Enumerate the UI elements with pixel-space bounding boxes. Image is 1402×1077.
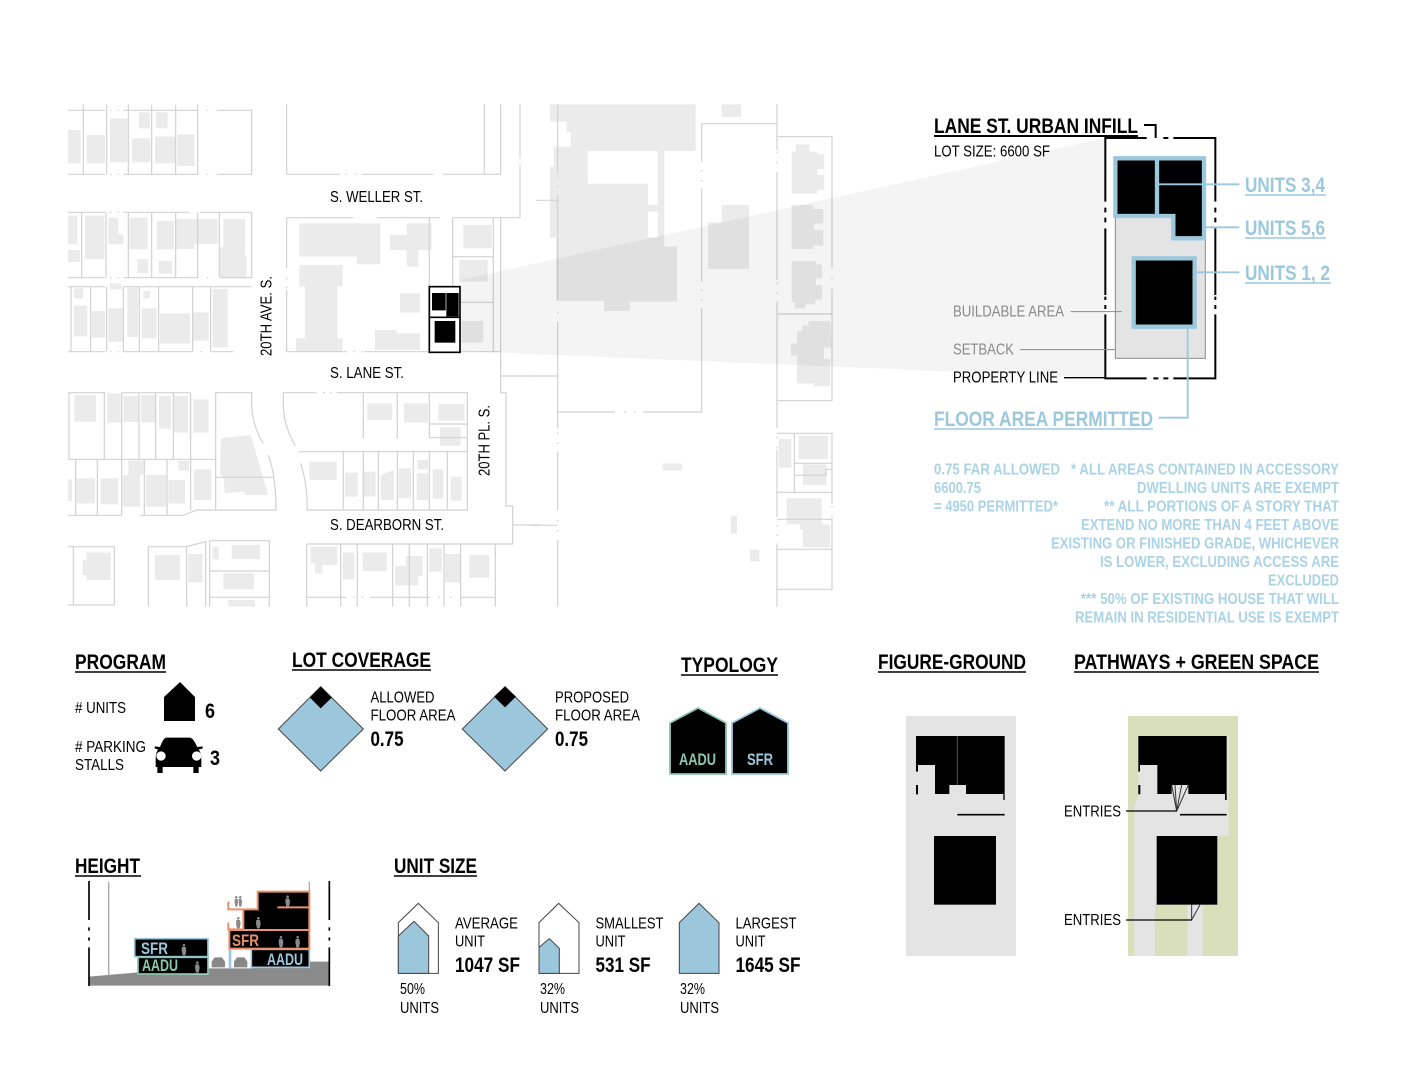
- street labels: S. DEARBORN ST.: [330, 517, 444, 534]
- exemption notes: IS LOWER, EXCLUDING ACCESS ARE: [1100, 554, 1339, 571]
- panel: unit size: [394, 854, 801, 1017]
- average unit share: UNITS: [400, 1000, 439, 1017]
- entries callout lower: ENTRIES: [1064, 912, 1121, 929]
- pathways plan: [1128, 716, 1238, 956]
- heading: program: PROGRAM: [75, 650, 166, 674]
- unit labels: UNITS 1, 2: [1245, 261, 1330, 285]
- site plan legend: BUILDABLE AREA: [953, 304, 1064, 320]
- entries callout upper: [1064, 804, 1177, 820]
- allowed floor area text: [370, 690, 456, 751]
- FAR calculation: = 4950 PERMITTED*: [934, 498, 1059, 516]
- icon: AADU house: AADU: [679, 750, 716, 769]
- average unit share: 50%: [400, 981, 425, 998]
- average unit text: 1047 SF: [455, 954, 520, 977]
- lot size: LOT SIZE: 6600 SF: [934, 144, 1050, 160]
- building labels: AADU: [142, 956, 178, 975]
- largest unit share: [680, 981, 719, 1017]
- units 1-2 footprint: [1134, 258, 1195, 327]
- unit labels: UNITS 5,6: [1245, 216, 1325, 240]
- smallest unit text: UNIT: [596, 934, 626, 950]
- allowed floor area text: 0.75: [370, 728, 404, 751]
- figure-ground plan: [906, 716, 1016, 956]
- building labels: AADU: [267, 950, 303, 969]
- building labels: [141, 931, 303, 975]
- exemption notes: ** ALL PORTIONS OF A STORY THAT: [1104, 498, 1339, 516]
- street labels: S. LANE ST.: [330, 365, 404, 382]
- site plan legend: PROPERTY LINE: [953, 370, 1058, 386]
- panel: program: [75, 650, 220, 774]
- units 3-6 footprint: [1115, 158, 1204, 238]
- floor area permitted heading: FLOOR AREA PERMITTED: [934, 407, 1153, 431]
- FAR calculation: 0.75 FAR ALLOWED: [934, 462, 1060, 478]
- street labels: 20TH AVE. S.: [258, 276, 276, 356]
- icon: car: [155, 738, 203, 773]
- street labels: 20TH PL. S.: [476, 405, 494, 476]
- heading: unit size: UNIT SIZE: [394, 854, 477, 878]
- smallest unit text: 531 SF: [596, 954, 651, 977]
- icon: house: [164, 682, 195, 721]
- street labels: S. WELLER ST.: [330, 189, 423, 206]
- map: north-west blocks: [68, 104, 252, 352]
- section drawing: [89, 881, 329, 986]
- entries callout upper: ENTRIES: [1064, 804, 1121, 820]
- map: project site footprint: [429, 287, 460, 352]
- largest unit text: LARGEST: [736, 916, 797, 932]
- proposed floor area text: PROPOSED: [555, 690, 629, 706]
- largest unit text: 1645 SF: [736, 954, 801, 977]
- FAR calculation: [934, 462, 1060, 516]
- panel: figure-ground: [878, 650, 1026, 956]
- proposed floor area text: FLOOR AREA: [555, 708, 640, 724]
- site plan diagram: [1020, 125, 1239, 418]
- proposed floor area text: 0.75: [555, 728, 588, 751]
- heading: lot coverage: LOT COVERAGE: [292, 648, 431, 672]
- vicinity map: [68, 104, 832, 607]
- parked cars: [212, 957, 247, 967]
- smallest unit share: 32%: [540, 981, 565, 998]
- heading: figure-ground: FIGURE-GROUND: [878, 650, 1026, 674]
- panel: lot coverage: [278, 648, 640, 771]
- allowed floor area text: ALLOWED: [370, 690, 434, 706]
- allowed floor area diamond: [278, 687, 363, 771]
- heading: pathways + green space: PATHWAYS + GREEN SPACE: [1074, 650, 1319, 674]
- exemption notes: EXCLUDED: [1268, 572, 1339, 590]
- map: south blocks: [68, 360, 540, 607]
- icon: SFR house: SFR: [747, 750, 773, 769]
- site plan legend: [953, 304, 1064, 386]
- proposed floor area diamond: [462, 687, 548, 771]
- largest unit text: [736, 916, 801, 977]
- property line: [1105, 125, 1215, 378]
- smallest unit share: [540, 981, 579, 1017]
- site plan legend: SETBACK: [953, 342, 1014, 358]
- divider between units: [1150, 158, 1163, 216]
- icon: average unit house: [398, 903, 438, 973]
- parking row label: STALLS: [75, 757, 124, 774]
- heading: height: HEIGHT: [75, 854, 140, 878]
- average unit text: UNIT: [455, 934, 485, 950]
- smallest unit text: [596, 916, 664, 977]
- building labels: SFR: [141, 939, 168, 958]
- largest unit share: UNITS: [680, 1000, 719, 1017]
- unit labels: [1245, 173, 1331, 285]
- units count: 6: [205, 700, 215, 723]
- exemption notes: *** 50% OF EXISTING HOUSE THAT WILL: [1081, 591, 1339, 608]
- allowed floor area text: FLOOR AREA: [370, 708, 456, 724]
- panel: typology: [670, 653, 788, 774]
- average unit share: [400, 981, 439, 1017]
- map: east blocks: [530, 104, 832, 607]
- property lines: [89, 881, 329, 986]
- entries callout lower: [1064, 912, 1192, 929]
- exemption notes: REMAIN IN RESIDENTIAL USE IS EXEMPT: [1075, 610, 1339, 626]
- exemption notes: * ALL AREAS CONTAINED IN ACCESSORY: [1071, 462, 1339, 478]
- heading: typology: TYPOLOGY: [681, 653, 778, 677]
- proposed floor area text: [555, 690, 640, 751]
- right building: [228, 892, 309, 968]
- exemption notes: EXISTING OR FINISHED GRADE, WHICHEVER: [1051, 536, 1339, 552]
- exemption notes: [1051, 462, 1339, 626]
- average unit text: [455, 916, 520, 977]
- panel: height: [75, 854, 329, 986]
- map: centre blocks: [287, 104, 520, 365]
- street labels: [258, 189, 494, 534]
- largest unit share: 32%: [680, 981, 705, 998]
- left building: [135, 939, 208, 974]
- FAR calculation: 6600.75: [934, 480, 981, 497]
- exemption notes: EXTEND NO MORE THAN 4 FEET ABOVE: [1081, 517, 1339, 534]
- icon: smallest unit house: [539, 903, 579, 973]
- unit labels: UNITS 3,4: [1245, 173, 1325, 197]
- parking count: 3: [210, 747, 220, 770]
- smallest unit text: SMALLEST: [596, 916, 664, 932]
- parking row label: # PARKING: [75, 739, 146, 756]
- buildable area: [1115, 158, 1205, 358]
- people figures: [182, 895, 300, 973]
- zoom wedge linking map to site plan: [460, 138, 1105, 378]
- title: LANE ST. URBAN INFILL: [934, 114, 1138, 138]
- largest unit text: UNIT: [736, 934, 766, 950]
- average unit text: AVERAGE: [455, 916, 518, 932]
- parking row label: [75, 739, 146, 774]
- panel: pathways + green space: [1064, 650, 1319, 956]
- exemption notes: DWELLING UNITS ARE EXEMPT: [1137, 480, 1339, 497]
- icon: largest unit house: [679, 903, 719, 973]
- ground: [89, 962, 329, 986]
- units row label: # UNITS: [75, 700, 126, 717]
- leader lines: [1158, 184, 1239, 418]
- building labels: SFR: [232, 931, 259, 950]
- smallest unit share: UNITS: [540, 1000, 579, 1017]
